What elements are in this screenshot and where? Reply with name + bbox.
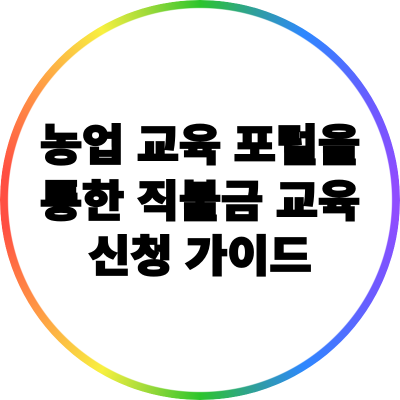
title line 2: 통한 직불금 교육 [40, 178, 360, 227]
title [40, 122, 360, 282]
title line 1: 농업 교육 포털을 [40, 122, 360, 171]
title line 3: 신청 가이드 [88, 234, 312, 282]
